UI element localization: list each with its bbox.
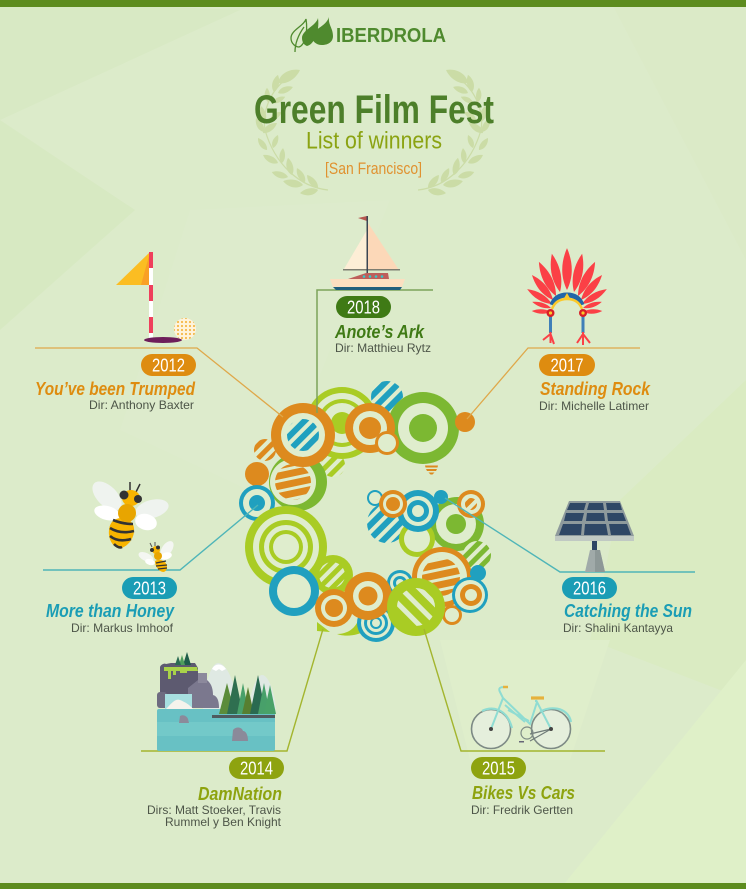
- film title: Standing Rock: [540, 379, 651, 399]
- year: 2013: [133, 578, 166, 598]
- film title: Catching the Sun: [564, 601, 692, 621]
- film title: DamNation: [198, 784, 282, 804]
- back circles: [239, 381, 491, 642]
- panel: 2018: [317, 216, 433, 413]
- panel: 2014: [141, 629, 323, 829]
- year: 2015: [482, 758, 515, 778]
- icon: three leaves: [291, 17, 333, 52]
- connector: [141, 629, 323, 751]
- icon: large bee: [87, 476, 171, 548]
- icon: golf flag: [116, 252, 196, 343]
- year: [141, 354, 196, 376]
- panel: 2017: [467, 248, 651, 419]
- connector: [35, 348, 283, 417]
- film title: Bikes Vs Cars: [472, 783, 575, 803]
- year: [471, 757, 526, 779]
- connector: [43, 505, 258, 570]
- year: [539, 354, 595, 376]
- connector: [317, 290, 433, 413]
- icon: solar panel: [555, 501, 634, 572]
- year: 2016: [573, 578, 606, 598]
- panel: 2012: [35, 252, 283, 417]
- year: [336, 296, 391, 318]
- connector: [467, 348, 640, 419]
- subtitle: List of winners: [306, 128, 442, 154]
- panel: 2015: [424, 629, 605, 817]
- panel: 2016: [445, 498, 695, 635]
- front circles: [269, 403, 488, 636]
- icon: small bee: [137, 539, 176, 572]
- icon: waterfall landscape: [157, 652, 276, 751]
- film title: Anote’s Ark: [334, 322, 425, 342]
- central G of circles: [239, 381, 491, 642]
- connector: [445, 498, 695, 572]
- logo: Iberdrola: [291, 17, 446, 52]
- wreath: [253, 66, 493, 197]
- director: Dir: Michelle Latimer: [539, 399, 649, 413]
- location: [San Francisco]: [325, 160, 422, 178]
- directors: [147, 803, 282, 829]
- panel: 2013: [43, 476, 258, 635]
- directors: Dirs: Matt Stoeker, Travis: [147, 803, 281, 817]
- year: [562, 577, 617, 599]
- director: Dir: Markus Imhoof: [71, 621, 174, 635]
- icon: sailboat: [330, 216, 405, 290]
- director: Dir: Shalini Kantayya: [563, 621, 673, 635]
- bottom bar: [0, 883, 746, 889]
- director: Dir: Matthieu Rytz: [335, 341, 431, 355]
- year: [122, 577, 177, 599]
- year: 2012: [152, 356, 185, 376]
- year: 2014: [240, 758, 273, 778]
- icon: bicycle: [472, 687, 571, 748]
- title: Green Film Fest: [254, 88, 494, 132]
- year: 2017: [550, 356, 584, 376]
- director: Dir: Anthony Baxter: [89, 398, 194, 412]
- year: [229, 757, 284, 779]
- top bar: [0, 0, 746, 7]
- connector: [424, 629, 605, 751]
- director: Dir: Fredrik Gertten: [471, 803, 573, 817]
- directors: Rummel y Ben Knight: [165, 815, 282, 829]
- icon: feather headdress: [525, 248, 609, 345]
- logo: Iberdrola: IBERDROLA: [336, 25, 446, 47]
- film title: More than Honey: [46, 601, 175, 621]
- year: 2018: [347, 298, 380, 318]
- film title: You’ve been Trumped: [35, 379, 196, 399]
